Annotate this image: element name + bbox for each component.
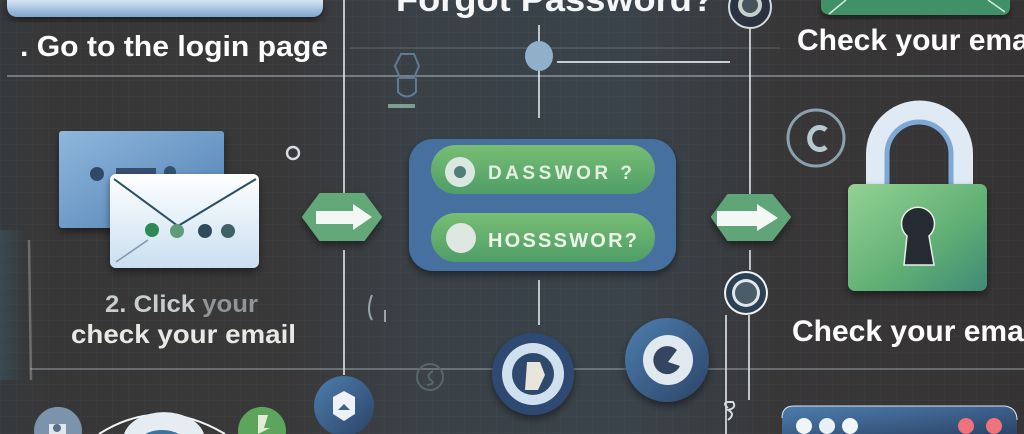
padlock — [848, 112, 987, 291]
small padlock sketch — [388, 54, 419, 106]
step two label — [71, 291, 296, 349]
pill two — [431, 213, 655, 262]
round button center — [492, 333, 574, 415]
pill two: HOSSSWOR? — [488, 230, 637, 252]
pill one — [431, 145, 655, 194]
small bottom key glyph — [725, 402, 734, 420]
blue badge — [314, 376, 374, 434]
grey badge — [34, 407, 82, 434]
mail window and envelope icon — [59, 131, 259, 268]
step two label: check your email — [71, 319, 296, 349]
faint ring icon — [417, 364, 443, 390]
top blue bar — [7, 0, 323, 17]
step one heading: . Go to the login page — [20, 31, 328, 63]
faint marker — [369, 295, 385, 322]
bottom right window bar — [782, 406, 1017, 434]
step two label: 2. Click your — [105, 291, 258, 318]
large oval icon — [99, 412, 225, 434]
slider knob — [525, 41, 730, 71]
small target icon — [724, 271, 768, 315]
copyright style ring icon — [788, 110, 844, 166]
pill one: DASSWOR ? — [488, 163, 632, 184]
arrow right — [712, 195, 790, 240]
password panel — [409, 139, 676, 271]
arrow left — [303, 194, 381, 240]
round button right — [625, 318, 709, 402]
small ring — [287, 147, 299, 159]
green envelope — [821, 0, 1010, 15]
top ring icon — [729, 0, 771, 28]
green badge — [238, 407, 286, 434]
